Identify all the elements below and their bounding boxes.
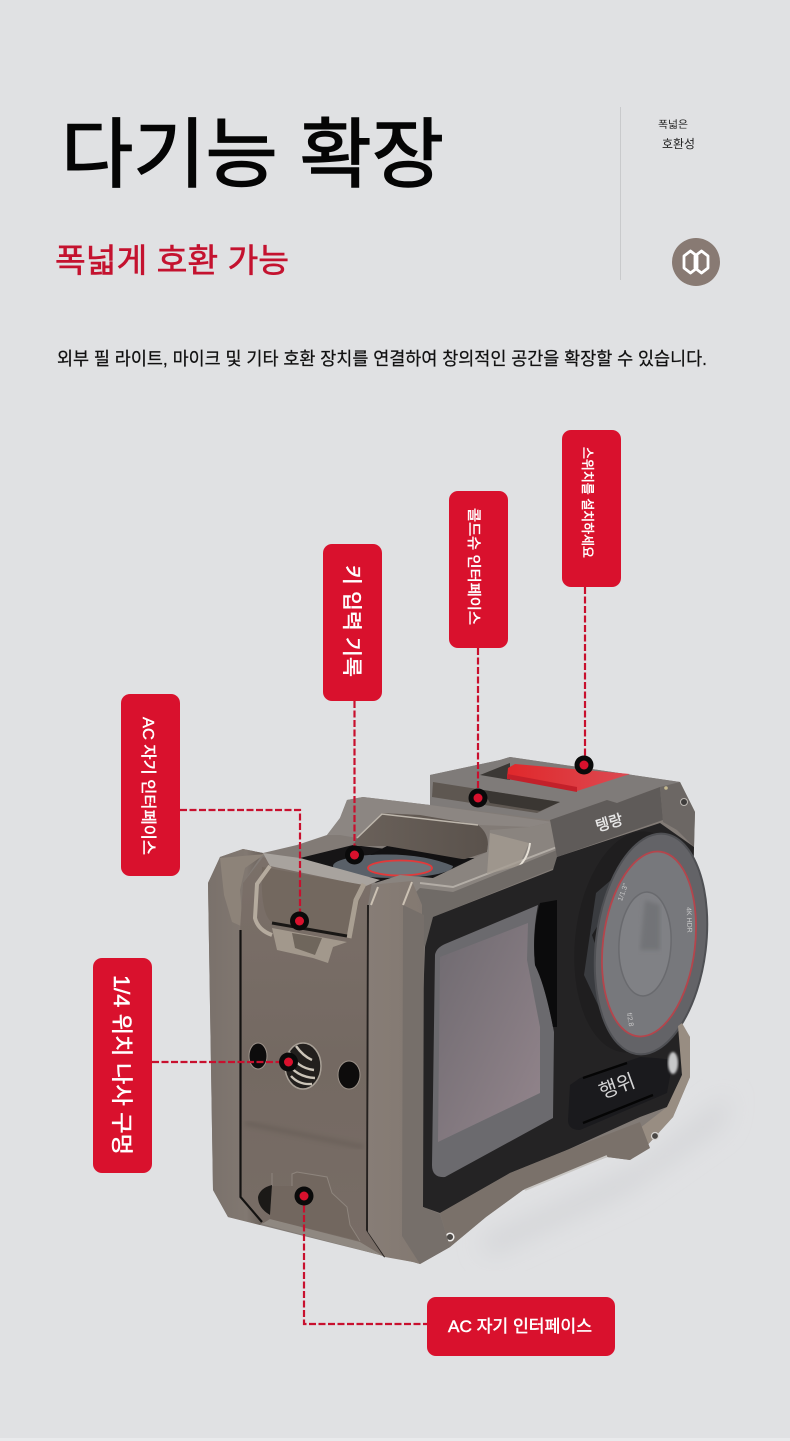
front rail lower surface	[369, 822, 557, 920]
front rail top	[327, 797, 553, 838]
bottom frame strip	[440, 1122, 650, 1247]
dark side notch	[534, 900, 557, 1027]
plate band	[245, 1123, 363, 1147]
lens assembly: f/2.8	[625, 1012, 634, 1027]
black rubber body	[422, 823, 694, 1213]
subtitle: 폭넓게 호환 가능	[55, 242, 289, 279]
leader lines	[152, 587, 585, 1324]
rivet top	[680, 798, 688, 806]
callout: AC magnetic interface horizontal	[427, 1297, 615, 1356]
mounting hole left	[249, 1043, 267, 1069]
callout: AC magnetic interface vertical: AC 자기 인터페이스	[139, 717, 157, 855]
top bar dark face	[550, 787, 663, 857]
red switch	[507, 764, 630, 791]
screen display	[438, 923, 540, 1142]
bottom notch	[258, 1172, 360, 1241]
title: 다기능 확장	[61, 113, 444, 198]
side caption: 호환성	[662, 137, 695, 151]
red ring	[368, 860, 432, 876]
plate top band	[263, 853, 380, 886]
right frame loop	[640, 1023, 690, 1150]
lens red ring	[592, 846, 706, 1042]
black grip button: 행위	[596, 1069, 638, 1104]
camera cage product photo	[208, 757, 730, 1264]
side caption	[658, 119, 695, 151]
knurled side knob	[220, 854, 265, 927]
top slot recess	[432, 782, 560, 813]
lens glass	[616, 891, 674, 997]
plate seams	[240, 930, 262, 1222]
lens markings: 4K HDR	[685, 907, 692, 933]
mounting hole right	[338, 1061, 360, 1089]
callout: quarter inch screw hole	[93, 958, 152, 1173]
brand mark top: 텡랑	[594, 811, 625, 835]
threaded mount hole	[285, 1043, 321, 1089]
description text: 외부 필 라이트, 마이크 및 기타 호환 장치를 연결하여 창의적인 공간을 확장할 수 있습니다.	[57, 349, 707, 369]
switch gap	[480, 763, 510, 780]
callout: cold shoe interface: 콜드슈 인터페이스	[466, 508, 482, 625]
lens assembly: 1/1.3"	[617, 882, 630, 902]
column facet	[402, 905, 450, 1264]
right end cap	[660, 782, 695, 847]
recess back wall	[353, 813, 488, 860]
rivets lower	[652, 1132, 658, 1140]
callout: switch: 스위치를 설치하세요	[580, 447, 595, 558]
lens opening recess	[300, 845, 486, 884]
lens outer ring	[583, 827, 719, 1061]
icon: interlocked hexagons	[672, 238, 720, 286]
plate lower lip	[262, 1219, 385, 1257]
lens knurled housing	[564, 825, 706, 1059]
cage silhouette	[208, 757, 695, 1264]
frame below rail	[403, 850, 557, 947]
callout: quarter inch screw hole: 1/4 위치 나사 구멍	[109, 975, 134, 1155]
callout: AC magnetic interface horizontal: AC 자기 인터페이스	[448, 1317, 592, 1336]
rail highlight	[420, 847, 557, 887]
side caption: 폭넓은	[658, 119, 688, 131]
marker dots	[279, 756, 594, 1206]
callout: switch	[562, 430, 621, 587]
front plate	[240, 857, 385, 1257]
black grip button	[568, 1052, 678, 1130]
floor shadow	[480, 1095, 730, 1255]
callout: AC magnetic interface vertical	[121, 694, 180, 876]
callout: key input: 키 입력 기록	[340, 565, 363, 677]
vertical divider	[620, 107, 621, 280]
lens assembly	[564, 825, 719, 1061]
callout: cold shoe interface	[449, 491, 508, 648]
plate top notch	[262, 867, 364, 935]
top surface of rear bar	[430, 757, 680, 820]
callout: key input	[323, 544, 382, 701]
corner column	[368, 881, 450, 1264]
left side strip	[208, 849, 263, 1225]
top lens disk	[333, 854, 453, 878]
latch tab	[272, 928, 347, 963]
screen bezel	[432, 905, 554, 1177]
